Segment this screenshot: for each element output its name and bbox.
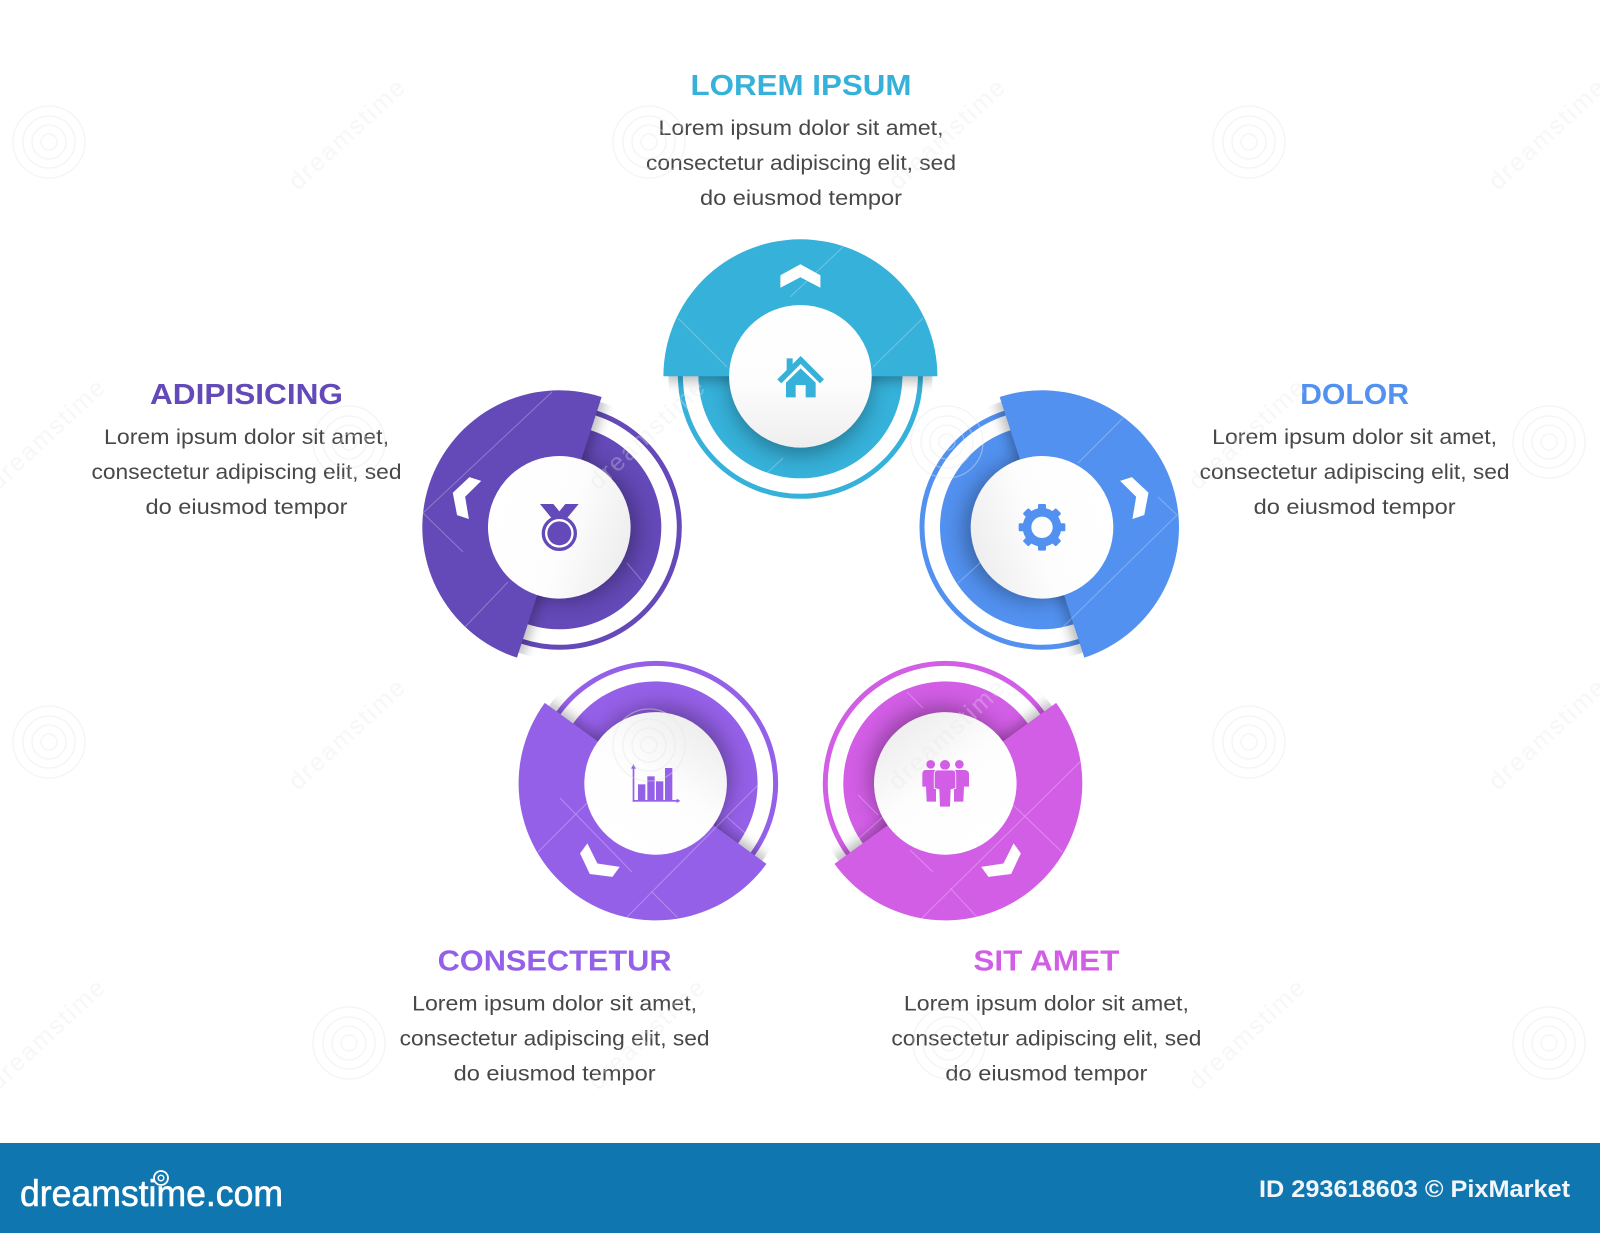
icon: logo swirl	[154, 1171, 168, 1185]
watermark: diagonal text: dreamstime	[1183, 973, 1312, 1096]
text block: adipisicing	[92, 424, 402, 519]
watermark: diagonal text: dreamstime	[283, 73, 412, 196]
watermark: spirals	[13, 106, 1585, 1079]
circle module: blue	[920, 390, 1179, 658]
text block: sit amet: do eiusmod tempor	[945, 1060, 1147, 1086]
text block: dolor: do eiusmod tempor	[1254, 494, 1456, 519]
watermark: diagonal text: dreamstime	[283, 673, 412, 796]
watermark: diagonal text: dreamstime	[883, 73, 1012, 196]
circle module: pink	[822, 660, 1082, 920]
text block: adipisicing: consectetur adipiscing elit, sed	[92, 459, 402, 484]
icon: bar chart	[631, 764, 680, 803]
text block: lorem ipsum	[646, 115, 956, 210]
circle module: cyan	[663, 239, 937, 496]
circle module: deep purple	[422, 390, 682, 658]
icon: gear	[1019, 504, 1065, 551]
footer logo: dreamstime.com: dreamstime.com	[20, 1173, 283, 1214]
watermark: diagonal text: dreamstime	[583, 373, 712, 496]
watermark: diagonal text: dreamstime	[883, 673, 1012, 796]
heading: adipisicing: ADIPISICING	[150, 379, 343, 411]
text block: consectetur: consectetur adipiscing elit, sed	[400, 1026, 710, 1050]
text block: dolor	[1200, 424, 1510, 519]
watermark: diagonal text: dreamstime	[1183, 373, 1312, 496]
circle module: violet	[518, 660, 778, 920]
text block: consectetur	[400, 990, 710, 1086]
panel: left step adipisicing	[92, 355, 716, 695]
heading: sit amet: SIT AMET	[973, 946, 1120, 978]
text block: lorem ipsum: do eiusmod tempor	[700, 185, 902, 210]
text block: sit amet	[891, 990, 1201, 1086]
icon: people	[922, 760, 969, 807]
text block: adipisicing: Lorem ipsum dolor sit amet,	[104, 424, 389, 449]
panel: right step dolor	[886, 355, 1510, 695]
text block: sit amet: consectetur adipiscing elit, sed	[891, 1026, 1201, 1050]
footer credit: ID 293618603 © PixMarket	[1259, 1176, 1570, 1203]
heading: lorem ipsum: LOREM IPSUM	[690, 70, 912, 102]
icon: house	[777, 356, 824, 397]
text block: consectetur: do eiusmod tempor	[454, 1060, 656, 1086]
text block: lorem ipsum: Lorem ipsum dolor sit amet,	[658, 115, 944, 140]
text block: consectetur: Lorem ipsum dolor sit amet,	[412, 990, 697, 1016]
watermark: diagonal text: dreamstime	[583, 973, 712, 1096]
text block: adipisicing: do eiusmod tempor	[146, 494, 348, 519]
panel: bottom left step consectetur	[400, 660, 778, 1085]
text block: sit amet: Lorem ipsum dolor sit amet,	[904, 990, 1189, 1016]
panel: bottom right step sit amet	[822, 660, 1200, 1085]
footer band	[0, 1143, 1600, 1233]
heading: dolor: DOLOR	[1300, 379, 1409, 411]
panel: top step lorem ipsum	[646, 70, 956, 496]
icon: medal	[540, 504, 579, 549]
heading: consectetur: CONSECTETUR	[438, 946, 672, 978]
text block: dolor: consectetur adipiscing elit, sed	[1200, 459, 1510, 484]
text block: lorem ipsum: consectetur adipiscing elit, sed	[646, 150, 956, 175]
text block: dolor: Lorem ipsum dolor sit amet,	[1212, 424, 1497, 449]
